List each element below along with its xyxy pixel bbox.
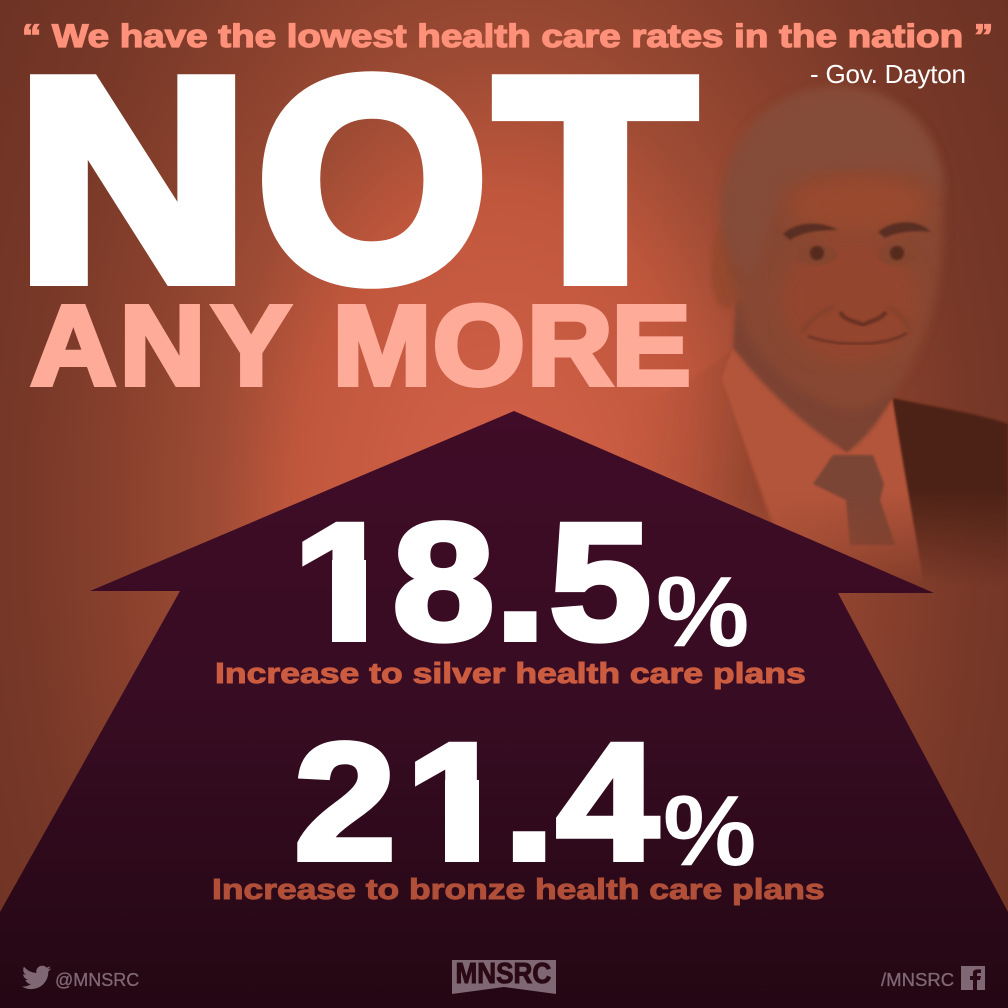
twitter handle: @MNSRC	[55, 970, 139, 990]
portrait of Gov. Dayton	[667, 87, 1008, 571]
bronze plans caption: Increase to bronze health care plans	[212, 873, 825, 905]
icon: facebook	[961, 966, 985, 990]
stat: 18.5%: %	[656, 555, 749, 667]
stat: 21.4%: %	[663, 774, 756, 886]
icon: twitter	[22, 966, 51, 989]
up arrow	[0, 411, 1008, 1008]
headline: ANY MORE: ANY MORE	[31, 282, 691, 409]
headline: NOT: N	[17, 20, 248, 340]
stat: 18.5%: 18.5	[293, 489, 651, 674]
stat: 21.4%: 21.4	[294, 709, 658, 894]
headline: NOT	[17, 19, 694, 340]
headline: NOT: T	[497, 20, 694, 339]
facebook handle: /MNSRC	[881, 969, 954, 990]
headline: NOT: O	[258, 19, 487, 340]
silver plans caption: Increase to silver health care plans	[215, 657, 806, 689]
quote: “ We have the lowest health care rates in the nation ”	[22, 18, 993, 54]
attribution: - Gov. Dayton	[810, 59, 966, 89]
logo: MNSRC	[456, 957, 551, 989]
